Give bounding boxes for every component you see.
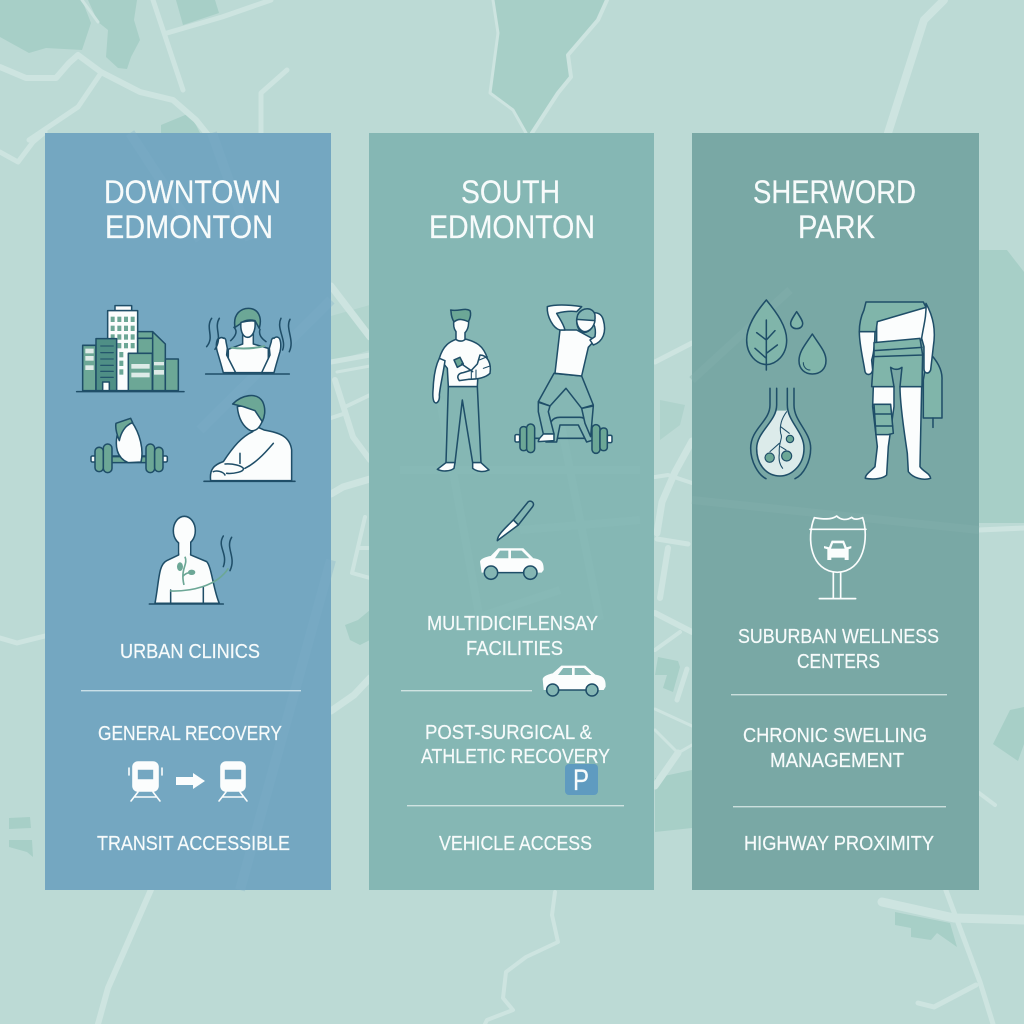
heading (429, 174, 595, 245)
label: suburban wellness centers (738, 626, 939, 673)
label: multidisciplinary facilities: FACILITIES (466, 638, 563, 660)
icon: lymph vessel (751, 388, 811, 479)
label: suburban wellness centers: SUBURBAN WELLNESS (738, 626, 939, 648)
label: chronic swelling management: CHRONIC SWELLING (743, 725, 927, 747)
heading (753, 174, 916, 245)
icon: body with compression wraps (859, 302, 942, 479)
heading: PARK (798, 209, 875, 245)
icon: woman with neck tension (206, 308, 291, 374)
icon: athlete lifting barbell (515, 305, 612, 453)
icon: parking sign (565, 764, 598, 797)
label: suburban wellness centers: CENTERS (797, 651, 880, 673)
heading (104, 174, 281, 245)
icon: car on divider (543, 666, 606, 696)
label: post-surgical and athletic recovery: POST-SURGICAL & (425, 722, 593, 744)
panel: South Edmonton (369, 133, 654, 890)
label: urban clinics: URBAN CLINICS (120, 641, 260, 663)
label: post-surgical and athletic recovery (421, 722, 610, 768)
icon: torso with leaf (149, 516, 232, 604)
panel: Sherwood Park (692, 133, 979, 890)
label: chronic swelling management (743, 725, 927, 772)
heading: DOWNTOWN (104, 174, 281, 210)
icon: shoulder and dumbbell (91, 418, 167, 473)
heading: EDMONTON (429, 209, 595, 245)
label: general recovery: GENERAL RECOVERY (98, 723, 282, 745)
icon: wine glass with car (810, 516, 866, 599)
heading: SOUTH (461, 174, 560, 210)
icon: scalpel (497, 501, 533, 541)
label: transit accessible: TRANSIT ACCESSIBLE (97, 833, 290, 855)
label: multidisciplinary facilities: MULTIDICIFLENSAY (427, 613, 598, 635)
label: vehicle access: VEHICLE ACCESS (439, 833, 592, 855)
icon: city buildings (77, 306, 184, 392)
label: post-surgical and athletic recovery: ATHLETIC RECOVERY (421, 746, 610, 768)
heading: EDMONTON (105, 209, 273, 245)
icon: man with arm brace (433, 309, 490, 472)
heading: SHERWORD (753, 174, 916, 210)
panel: Downtown Edmonton (45, 133, 331, 890)
icon: man holding arm (204, 396, 295, 481)
icon: car (480, 548, 544, 579)
icon: parking sign: P (573, 764, 589, 797)
label: multidisciplinary facilities (427, 613, 598, 660)
label: highway proximity: HIGHWAY PROXIMITY (744, 833, 934, 855)
icon: train to train (129, 762, 247, 801)
label: chronic swelling management: MANAGEMENT (770, 750, 904, 772)
icon: leaf and water drops (747, 300, 826, 374)
